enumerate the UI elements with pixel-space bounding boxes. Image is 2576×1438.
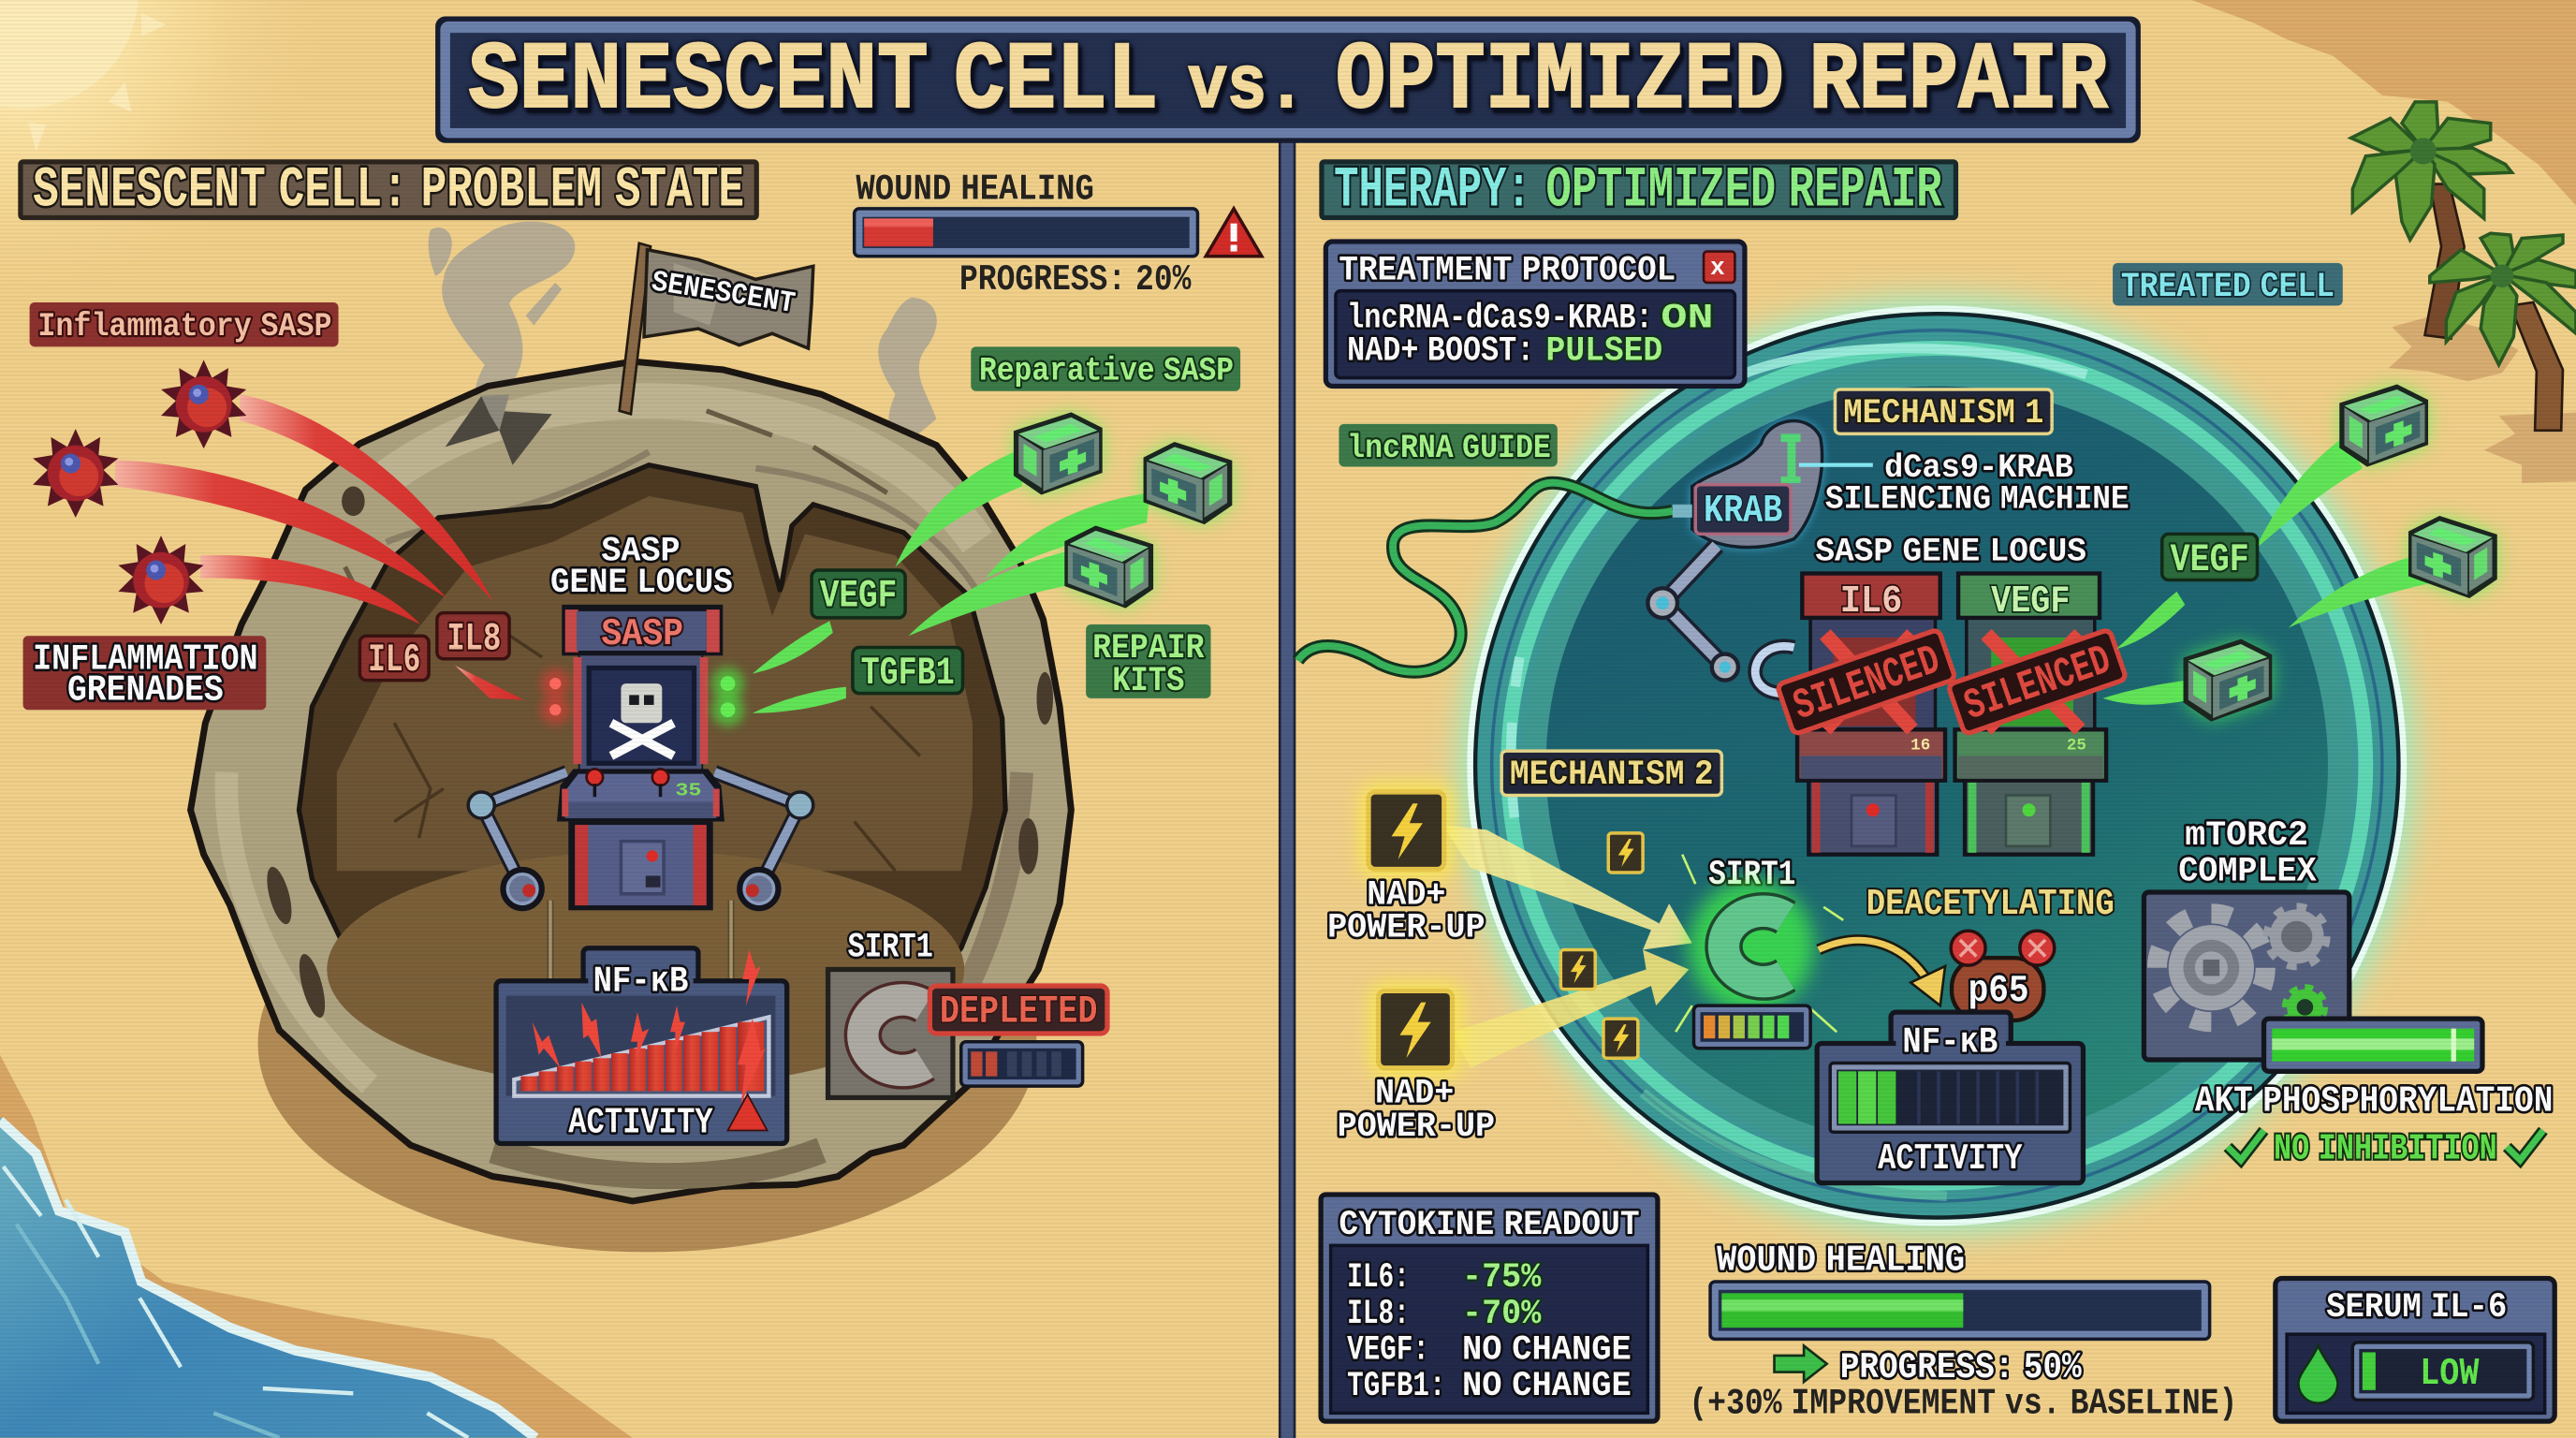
wound healing progress: 50% [1689,1240,2237,1424]
label: treated cell: TREATED CELL [2121,268,2334,307]
icon: inflammation grenade 3 [118,536,204,624]
arcade cabinet: SASP [557,605,724,910]
yellow NAD+ beams [1442,825,1692,1068]
cytokine readout panel [1321,1195,1658,1421]
label: mechanism 1: MECHANISM 1 [1843,394,2043,433]
mTORC2 complex [2144,816,2349,1060]
label: repair kits [1086,624,1211,701]
icon: NAD+ power-up 2 [1370,983,1462,1078]
cytokine readout panel: NO CHANGE [1462,1330,1632,1370]
lightning sparks [533,949,766,1104]
KRAB tag: KRAB [1704,488,1782,533]
cytokine readout panel: NO CHANGE [1462,1367,1632,1406]
title banner: vs. [1188,45,1306,130]
label: SASP gene locus: SASP GENE LOCUS [1815,533,2086,570]
label: SASP gene locus: GENE LOCUS [550,564,733,603]
senescent flag [620,243,813,414]
arcade cabinet: VEGF silenced [1955,574,2106,855]
icon: repair kit C [2185,640,2271,720]
treatment protocol panel: ON [1661,299,1714,338]
tag: VEGF: VEGF [820,574,897,619]
title banner: SENESCENT CELL [468,27,1158,136]
indicator lights [540,668,744,726]
arcade cabinet: VEGF silenced: 25 [2067,736,2086,755]
silenced marks [1777,629,2127,735]
green reparative trails [753,447,1150,713]
icon: green gear [2285,988,2324,1027]
SIRT1 depleted module: SIRT1 [848,928,933,967]
background: dark sand top right [2191,0,2576,205]
divider between panels [1280,139,1295,1438]
label: dCas9-KRAB silencing machine [1825,449,2130,518]
label: inflammation grenades: INFLAMMATION [33,638,258,680]
cytokine readout panel: VEGF: [1347,1330,1429,1370]
lncRNA guide strand [1298,483,1673,672]
SIRT1 level bar [961,1042,1083,1086]
green therapy trails [2103,435,2428,705]
title banner [435,17,2141,143]
tag: TGFB1: TGFB1 [861,651,955,696]
label: NAD+ power-up 2: POWER-UP [1338,1108,1495,1147]
dCas9-KRAB machine [1647,421,1873,694]
cell interior cavity [299,465,1005,1088]
label: dCas9-KRAB silencing machine: SILENCING MACHINE [1825,480,2130,518]
smoke plumes [429,222,937,436]
background: ocean and shoreline [0,1055,633,1438]
palm tree: upper [2351,102,2512,339]
stamp: silenced VEGF [1948,629,2127,735]
title banner: OPTIMIZED REPAIR [1336,27,2108,136]
wound healing progress: 20% [855,169,1262,301]
label: NAD+ power-up 2: NAD+ [1375,1075,1454,1114]
label: NAD+ power-up 1 [1327,875,1486,947]
NF-kB activity panel: high: ACTIVITY [568,1102,713,1143]
treatment protocol panel: NAD+ BOOST: [1347,331,1534,371]
wound healing progress: 20%: PROGRESS: 20% [959,259,1192,301]
stamp: silenced IL6 [1777,629,1955,735]
tag: IL6: IL6 [368,638,420,682]
wound healing progress: 50%: WOUND HEALING [1717,1240,1965,1282]
close button [1704,252,1734,283]
treatment protocol panel: TREATMENT PROTOCOL [1339,251,1676,290]
label: NAD+ power-up 1: POWER-UP [1327,908,1486,947]
NF-kB activity panel: low: NF-κB [1902,1021,1998,1063]
palm tree: lower [2430,233,2576,431]
mTORC2 complex: mTORC2 [2185,816,2308,856]
low level bar [2352,1343,2533,1400]
low level bar: LOW [2420,1353,2480,1396]
tag: VEGF: VEGF [2170,537,2249,582]
activity meter [514,1017,768,1096]
SIRT1 energy bar [1694,1005,1810,1049]
cytokine readout panel: TGFB1: [1347,1367,1445,1406]
senescent flag: SENESCENT [650,266,798,321]
SIRT1 depleted module [828,928,1107,1097]
icon: green drop [2298,1345,2338,1403]
icon: rising triangle [728,1094,768,1131]
p65 molecule [1951,931,2055,1020]
red inflammation trails [115,394,524,700]
cytokine readout panel: -75% [1462,1258,1542,1298]
cytokine readout panel: IL6: [1347,1258,1410,1298]
arcade cabinet: SASP: SASP [601,613,683,656]
arcade cabinet: VEGF silenced: VEGF [1991,580,2070,624]
label: NAD+ power-up 1: NAD+ [1367,875,1445,915]
label: dCas9-KRAB silencing machine: dCas9-KRAB [1884,449,2073,487]
arcade cabinet: IL6 silenced [1797,574,1945,855]
activity meter [1830,1064,2070,1132]
panel: senescent cell problem state [18,158,1262,1252]
NF-kB activity panel: low [1817,1012,2083,1183]
label: inflammatory SASP: Inflammatory SASP [37,308,332,345]
tag: IL8: IL8 [446,616,501,661]
label: mechanism 2: MECHANISM 2 [1510,756,1714,795]
label: deacetylating: DEACETYLATING [1866,884,2115,925]
label: repair kits: REPAIR [1092,629,1205,668]
heading: therapy [1319,158,1958,223]
arrow: SIRT1 to p65 [1819,940,1945,1005]
stamp: silenced VEGF: SILENCED [1958,636,2117,731]
heading: therapy: OPTIMIZED REPAIR [1546,158,1942,223]
cytokine readout panel: -70% [1462,1295,1542,1334]
robotic claw arm [1647,546,1794,694]
label: reparative SASP: Reparative SASP [979,352,1234,389]
stamp: silenced IL6: SILENCED [1788,636,1946,731]
serum IL-6 panel: SERUM IL-6 [2326,1288,2507,1328]
label: NAD+ power-up 2 [1338,1075,1495,1147]
SIRT1 active module: SIRT1 [1708,856,1795,895]
close button: x [1710,254,1725,282]
wound healing progress: 50%: PROGRESS: 50% [1840,1347,2082,1388]
icon: small gear [2267,907,2326,966]
SIRT1 active module [1676,855,1843,1049]
icon: NAD+ power-up 1 [1360,784,1453,879]
treatment protocol panel: lncRNA-dCas9-KRAB: [1347,299,1653,338]
arcade cabinet: IL6 silenced: IL6 [1840,580,1902,624]
arcade cabinet: SASP: 35 [675,780,701,800]
panel: therapy optimized repair [1298,158,2554,1424]
label: repair kits: KITS [1112,662,1184,701]
p65 molecule: p65 [1969,970,2029,1013]
label: lncRNA guide: lncRNA GUIDE [1347,430,1551,467]
cell shadow on sand [258,835,1036,1252]
arcade screen [587,666,696,766]
icon: inflammation grenade 1 [161,360,246,448]
cytokine readout panel: IL8: [1347,1295,1410,1334]
label: inflammation grenades [23,636,266,712]
heading: problem state: SENESCENT CELL: PROBLEM STATE [33,158,744,223]
senescent cell: rocky membrane [191,361,1071,1201]
icon: repair kit A [2341,386,2426,465]
arcade cabinet: IL6 silenced: 16 [1910,736,1930,755]
status: no inhibition: NO INHIBITION [2274,1128,2497,1169]
icon: sun [0,0,329,312]
icon: inflammation grenade 2 [33,429,118,518]
NF-kB activity panel: high: NF-κB [593,961,688,1002]
icon: repair kit B [2410,518,2496,596]
icon: repair kit 2 [1145,444,1231,522]
NF-kB activity panel: high [496,948,787,1144]
icons: small energy bolts [1560,833,1643,1058]
treated cell [1460,299,2413,1232]
AKT phosphorylation bar [2264,1019,2482,1071]
wound healing progress: 20%: WOUND HEALING [856,169,1094,210]
label: SASP gene locus: SASP [601,532,681,571]
wound healing progress: 50%: (+30% IMPROVEMENT vs. BASELINE) [1689,1383,2237,1424]
status: depleted: DEPLETED [940,990,1097,1034]
NF-kB activity panel: low: ACTIVITY [1878,1138,2023,1180]
icon: warning triangle [1206,209,1262,257]
label: SASP gene locus [550,532,733,603]
robotic arms and ropes [468,772,813,986]
serum IL-6 panel [2276,1278,2554,1421]
icon: repair kit 1 [1016,414,1101,493]
treatment protocol panel: PULSED [1546,331,1662,371]
icon: repair kit 3 [1066,527,1151,607]
label: inflammation grenades: GRENADES [67,670,224,712]
icon: large gear [2157,914,2265,1022]
palm shadows on sand [2389,315,2576,483]
treatment protocol panel [1325,242,1745,386]
mTORC2 complex: COMPLEX [2178,853,2318,892]
heading: therapy: THERAPY: [1334,158,1531,223]
icon: green arrow [1775,1345,1827,1382]
cytokine readout panel: CYTOKINE READOUT [1339,1206,1640,1245]
